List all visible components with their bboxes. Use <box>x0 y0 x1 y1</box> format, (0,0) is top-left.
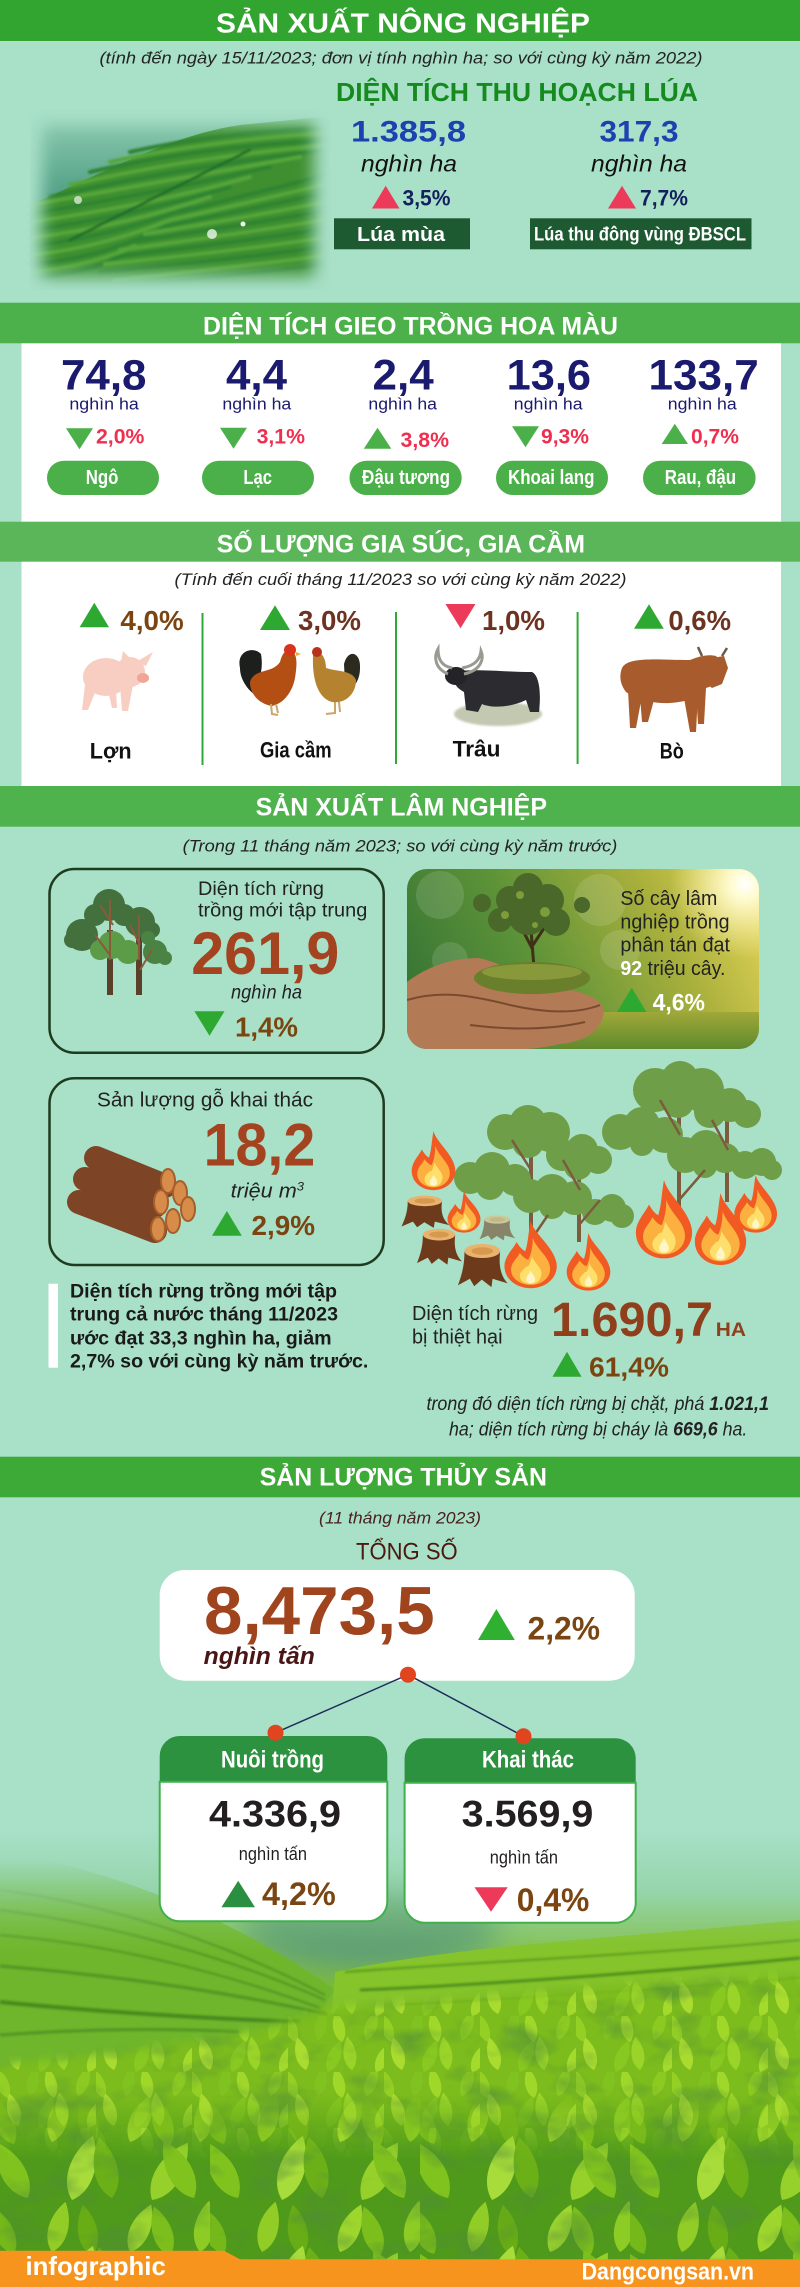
title band <box>0 0 800 41</box>
crop: corn: Ngô <box>86 467 118 489</box>
panel: timber output: Sản lượng gỗ khai thác <box>97 1089 313 1112</box>
panel: scattered tree planting: Số cây lâm <box>620 888 717 910</box>
callout: new forest note: Diện tích rừng trồng mới tập <box>70 1282 337 1303</box>
stat: damaged forest: 1.690,7 <box>551 1294 713 1347</box>
panel: aquaculture <box>160 1736 387 1921</box>
panel: new forest area: trồng mới tập trung <box>198 901 367 922</box>
icon: rooster <box>239 644 301 715</box>
fisheries note: (11 tháng năm 2023) <box>319 1508 481 1527</box>
heading: rice harvest: DIỆN TÍCH THU HOẠCH LÚA <box>336 77 698 107</box>
band: fisheries: SẢN LƯỢNG THỦY SẢN <box>260 1462 547 1492</box>
livestock: cow: 0,6% <box>668 605 731 636</box>
panel: timber output <box>50 1078 384 1265</box>
crop: vegetables: 133,7 <box>648 351 759 399</box>
livestock: buffalo: 1,0% <box>482 605 545 636</box>
icon: hen <box>312 647 360 714</box>
crop: vegetables: nghìn ha <box>668 394 737 413</box>
crop: soybean: nghìn ha <box>368 394 438 413</box>
panel: scattered tree planting: nghiệp trồng <box>620 911 730 933</box>
livestock: cow: Bò <box>660 739 684 764</box>
panel: capture fisheries: Khai thác <box>482 1747 574 1774</box>
crop: vegetables: 0,7% <box>691 426 739 449</box>
crop: soybean: 3,8% <box>400 429 449 452</box>
stat: damaged forest: Diện tích rừng <box>412 1303 538 1325</box>
footer band <box>0 2251 800 2287</box>
stat: autumn-winter rice: nghìn ha <box>591 151 687 177</box>
title: SẢN XUẤT NÔNG NGHIỆP <box>216 6 590 38</box>
livestock: poultry <box>239 605 361 762</box>
crop: sweet potato: 9,3% <box>541 426 589 449</box>
icon: logs <box>79 1158 195 1241</box>
crop: sweet potato: 13,6 <box>507 351 591 399</box>
stat: autumn-winter rice: 317,3 <box>600 116 678 149</box>
panel: total fisheries: 8,473,5 <box>204 1573 435 1649</box>
crop: soybean: Đậu tương <box>362 467 450 489</box>
livestock: pig: 4,0% <box>120 605 184 636</box>
panel: aquaculture: 4,2% <box>262 1876 336 1912</box>
crop: soybean: 2,4 <box>372 351 434 399</box>
stat: autumn-winter rice <box>530 116 752 249</box>
icon: hands <box>407 958 604 1051</box>
photo: tea terraces <box>30 110 330 290</box>
band: crops <box>0 303 800 343</box>
livestock: cow <box>620 604 731 764</box>
stat: damaged forest: ha; diện tích rừng bị cháy là 669,6 ha. <box>449 1420 747 1441</box>
crop: sweet potato <box>496 351 608 495</box>
stat: autumn rice: 3,5% <box>402 186 450 211</box>
panel: capture fisheries: 0,4% <box>517 1882 589 1918</box>
stat: autumn rice: Lúa mùa <box>357 224 446 246</box>
band: forestry <box>0 786 800 827</box>
stat: autumn rice <box>334 116 470 249</box>
icon: tree stumps <box>402 1196 515 1287</box>
subtitle: (tính đến ngày 15/11/2023; đơn vị tính nghìn ha; so với cùng kỳ năm 2022) <box>100 50 702 68</box>
panel: scattered tree planting: phân tán đạt <box>620 935 730 957</box>
icon: buffalo <box>436 649 542 726</box>
stat: autumn-winter rice: Lúa thu đông vùng ĐBSCL <box>534 225 746 246</box>
stat: damaged forest: trong đó diện tích rừng bị chặt, phá 1.021,1 <box>426 1394 769 1415</box>
livestock note: (Tính đến cuối tháng 11/2023 so với cùng kỳ năm 2022) <box>174 570 626 589</box>
panel: aquaculture: Nuôi trồng <box>221 1747 324 1774</box>
stat: damaged forest <box>412 1294 769 1441</box>
forestry note: (Trong 11 tháng năm 2023; so với cùng kỳ năm trước) <box>183 837 617 856</box>
connector: total to branches <box>268 1667 532 1744</box>
icon: trees <box>64 889 172 995</box>
callout: new forest note: trung cả nước tháng 11/2023 <box>70 1305 338 1326</box>
panel: new forest area: Diện tích rừng <box>198 879 324 900</box>
footer band: infographic <box>26 2251 166 2281</box>
panel: timber output: 2,9% <box>252 1210 315 1241</box>
white panel behind crops and livestock <box>22 343 781 786</box>
band: livestock: SỐ LƯỢNG GIA SÚC, GIA CẦM <box>217 528 585 558</box>
panel: capture fisheries: 3.569,9 <box>462 1794 593 1835</box>
crop: corn: 2,0% <box>96 426 145 449</box>
panel: new forest area: 261,9 <box>191 920 339 987</box>
band: fisheries <box>0 1457 800 1497</box>
stat: autumn rice: nghìn ha <box>361 151 457 177</box>
crop: corn: nghìn ha <box>69 394 139 413</box>
icon: flames <box>412 1131 777 1291</box>
panel: aquaculture: nghìn tấn <box>239 1844 307 1864</box>
crop: sweet potato: Khoai lang <box>508 467 594 489</box>
livestock: buffalo: Trâu <box>453 737 500 762</box>
stat: autumn-winter rice: 7,7% <box>640 186 688 211</box>
panel: new forest area: 1,4% <box>235 1012 298 1043</box>
stat: autumn rice: 1.385,8 <box>351 116 466 149</box>
band: livestock <box>0 522 800 562</box>
panel: timber output: triệu m <box>231 1181 292 1203</box>
crop: corn <box>47 351 159 495</box>
panel: aquaculture: 4.336,9 <box>209 1794 341 1835</box>
crop: peanut: 3,1% <box>257 426 305 449</box>
stat: damaged forest: bị thiệt hại <box>412 1326 502 1348</box>
panel: timber output: 3 <box>297 1180 304 1194</box>
crop: peanut: Lạc <box>243 467 272 489</box>
crop: sweet potato: nghìn ha <box>514 394 583 413</box>
livestock: buffalo <box>436 604 545 762</box>
footer band: Dangcongsan.vn <box>582 2258 754 2285</box>
panel: capture fisheries: nghìn tấn <box>490 1847 558 1867</box>
crop: corn: 74,8 <box>61 351 146 399</box>
callout: new forest note <box>48 1282 368 1372</box>
panel: total fisheries: 2,2% <box>528 1610 600 1646</box>
livestock: poultry: 3,0% <box>298 605 361 636</box>
crop: soybean <box>350 351 462 495</box>
illustration: forest fire <box>402 1061 782 1291</box>
callout: new forest note: ước đạt 33,3 nghìn ha, giảm <box>70 1328 332 1349</box>
panel: total fisheries <box>160 1570 635 1681</box>
panel: scattered tree planting <box>407 869 759 1049</box>
crop: peanut: nghìn ha <box>222 394 292 413</box>
band: forestry: SẢN XUẤT LÂM NGHIỆP <box>256 792 547 822</box>
panel: scattered tree planting: 4,6% <box>653 990 705 1017</box>
callout: new forest note: 2,7% so với cùng kỳ năm trước. <box>70 1351 368 1372</box>
livestock: pig: Lợn <box>90 738 132 763</box>
livestock: pig <box>80 603 184 763</box>
livestock: poultry: Gia cầm <box>260 737 332 762</box>
icon: cow <box>620 647 728 732</box>
crop: peanut: 4,4 <box>226 351 287 399</box>
panel: scattered tree planting: 92 triệu cây. <box>620 958 725 980</box>
panel: timber output: 18,2 <box>204 1112 315 1179</box>
panel: new forest area <box>50 869 384 1053</box>
panel: total fisheries: nghìn tấn <box>204 1643 315 1670</box>
crop: vegetables: Rau, đậu <box>665 467 736 489</box>
panel: capture fisheries <box>405 1738 636 1923</box>
panel: new forest area: nghìn ha <box>231 982 302 1003</box>
stat: damaged forest: 61,4% <box>589 1352 669 1383</box>
icon: sapling <box>523 928 544 962</box>
band: crops: DIỆN TÍCH GIEO TRỒNG HOA MÀU <box>203 311 618 341</box>
stat: damaged forest: HA <box>716 1320 746 1341</box>
crop: vegetables <box>643 351 759 495</box>
background photo: tea hills and leaves <box>0 1830 800 2260</box>
icon: pig <box>82 651 153 711</box>
crop: peanut <box>202 351 314 495</box>
heading: total: TỔNG SỐ <box>356 1537 458 1565</box>
